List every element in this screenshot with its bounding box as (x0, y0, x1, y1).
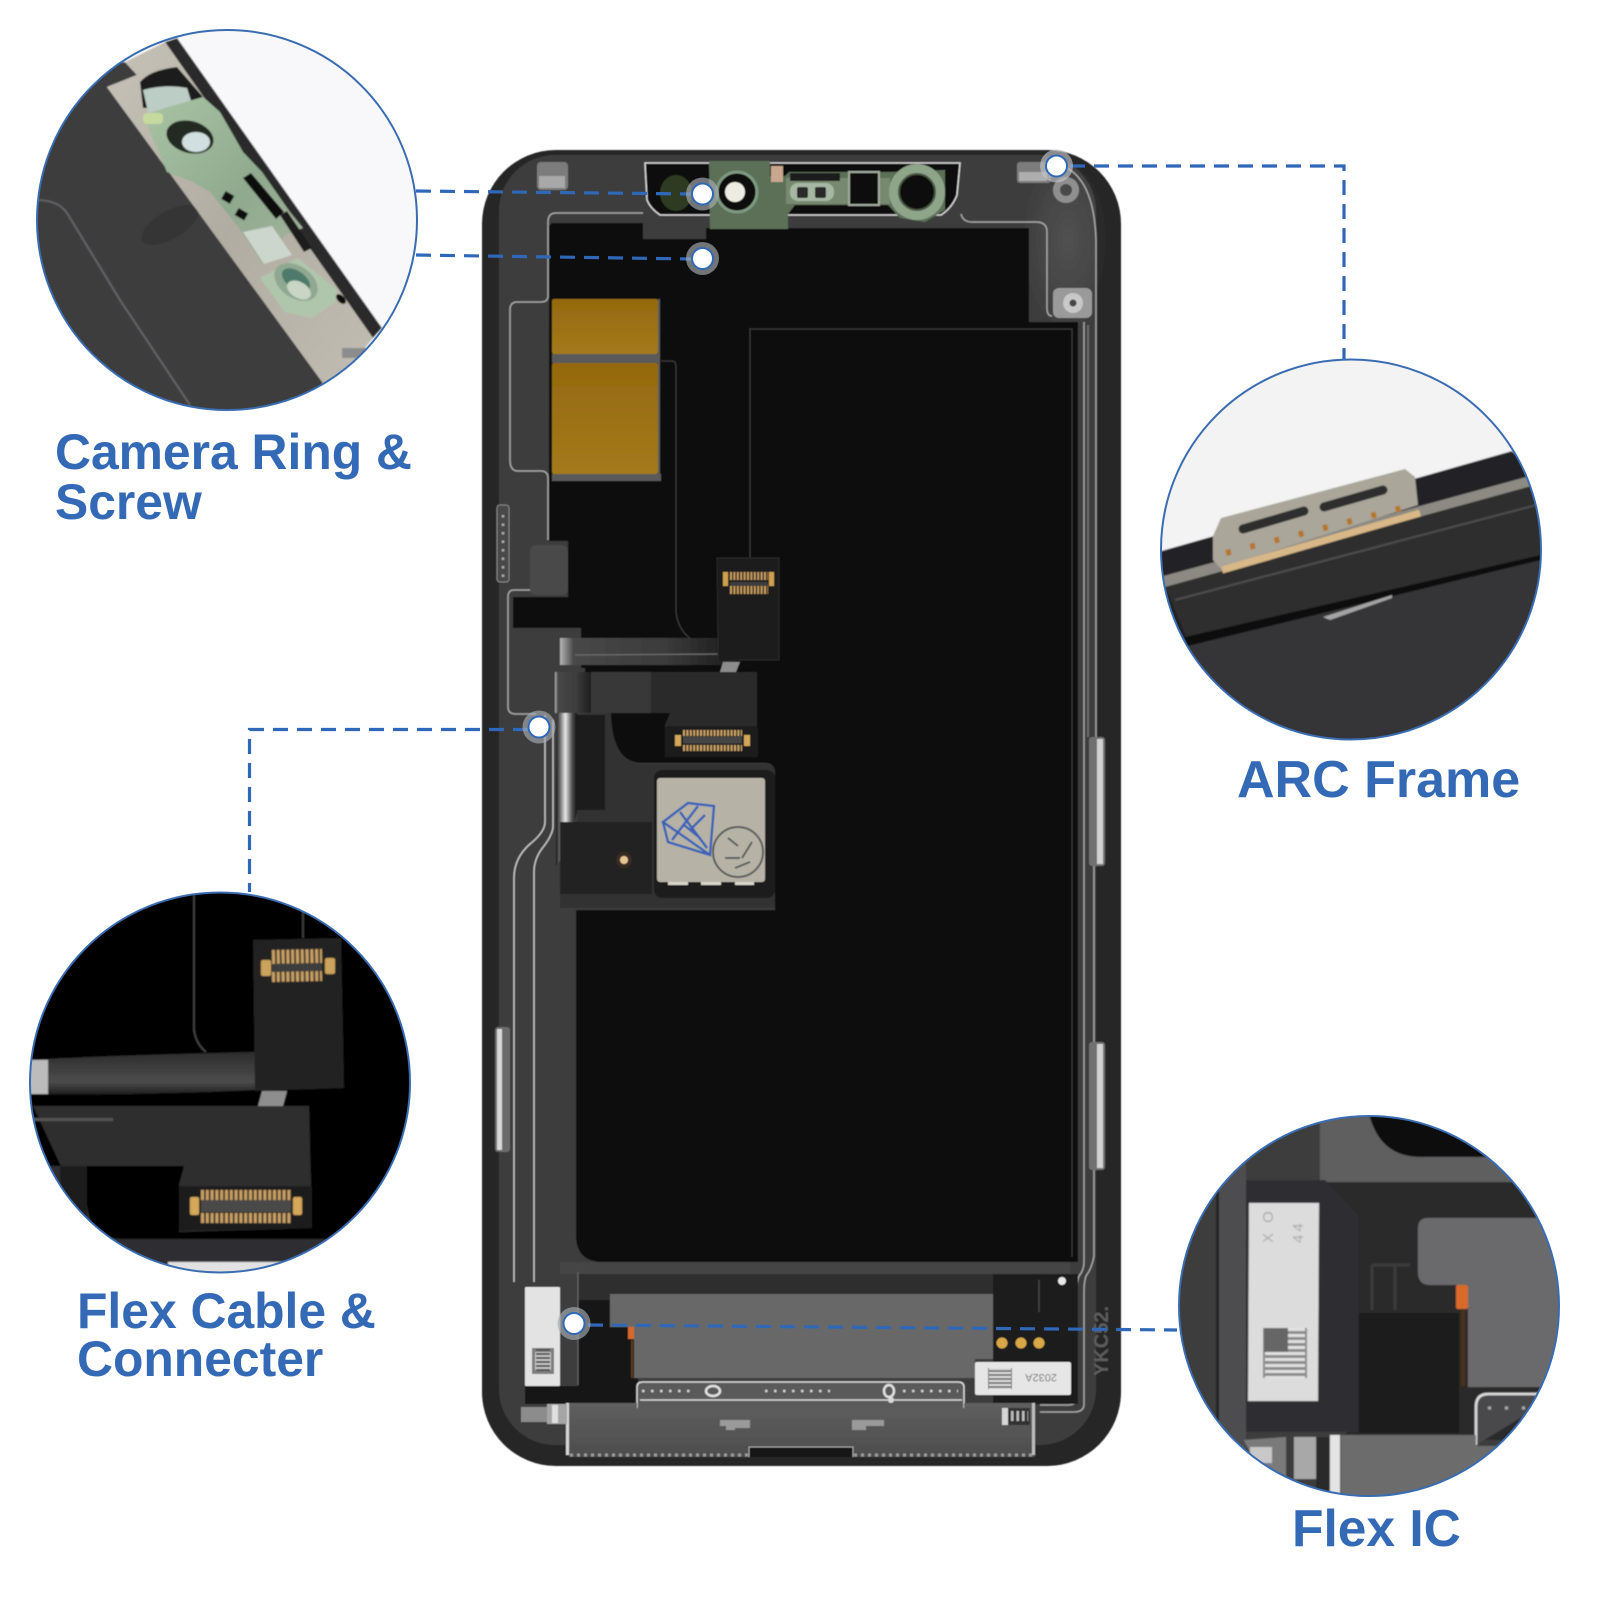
metal tab line (1476, 1394, 1560, 1445)
flex connector pad (665, 726, 758, 757)
light sliver (1323, 595, 1392, 620)
flex connector (723, 572, 774, 590)
plate right edge (1032, 1403, 1035, 1455)
magnified camera ring photo (38, 38, 383, 409)
phone outer body (482, 150, 1121, 1466)
bracket slots (1243, 511, 1304, 529)
chip solder pads (668, 882, 754, 885)
upper flex cable (560, 558, 779, 672)
label: Camera Ring & Screw: Camera Ring & (55, 424, 412, 480)
bracket body (709, 161, 945, 229)
lower dark region right (993, 1274, 1078, 1404)
flex connector (675, 733, 750, 748)
small white dot (1058, 1277, 1066, 1285)
flex highlight (30, 1060, 48, 1094)
thin panel edge lines (661, 329, 1072, 1257)
tag text second row: 44 (1290, 1220, 1307, 1243)
flex ribbon (555, 672, 757, 757)
lower dark region above sheet (578, 1274, 998, 1304)
metal shield chip (657, 778, 765, 885)
bottom left tabs (521, 1404, 567, 1424)
flex ribbon (560, 638, 730, 665)
solder dots (1226, 508, 1402, 553)
glare ribbon (556, 713, 577, 866)
marker: ARC frame (1040, 150, 1073, 182)
label: Flex IC: Flex IC (1292, 1499, 1461, 1557)
engraved code: YKC52. (1091, 1306, 1113, 1376)
side button tab left upper (497, 505, 509, 582)
magnified flex cable photo (28, 890, 414, 1280)
bracket sensor slots (790, 183, 834, 201)
metal strip bright (1294, 1437, 1316, 1479)
lens glass lower (243, 226, 292, 264)
marker: flex IC (558, 1307, 590, 1340)
qr code (532, 1348, 554, 1374)
black block (1359, 1313, 1459, 1433)
side button tab right upper (1089, 737, 1105, 866)
label: Flex Cable & Connecter: Flex Cable & (77, 1283, 376, 1339)
gold patch lower (552, 363, 658, 474)
qr code (1263, 1328, 1307, 1378)
flex shine (33, 1118, 113, 1121)
black seam (1185, 554, 1545, 648)
silver clip (258, 1091, 287, 1106)
panel lines (194, 892, 303, 1052)
slit dark (280, 211, 312, 252)
scratch line (36, 200, 190, 405)
callout: ARC frame (1158, 359, 1545, 745)
dark screen surface (20, 60, 323, 420)
screw plate right (1053, 288, 1092, 318)
lower flex ribbon (33, 1106, 312, 1232)
small tab (342, 348, 366, 358)
tag dark surround (1246, 1180, 1358, 1432)
lower flex cable (555, 672, 758, 757)
white tag left (525, 1287, 560, 1386)
silver bracket (1213, 469, 1418, 568)
bracket nub (143, 113, 163, 124)
small clip (771, 166, 783, 182)
center notch edges (749, 1447, 853, 1457)
leader: flex cable (250, 730, 528, 892)
front camera glint (660, 175, 692, 211)
side button tab left lower (495, 1027, 510, 1152)
top left clear tab (537, 162, 568, 190)
label: Camera Ring & Screw: Screw (55, 474, 202, 530)
upper speaker slot (790, 173, 840, 181)
frame outlines (508, 165, 1096, 1412)
top notch cutout (645, 163, 960, 215)
black frame top surface (1162, 450, 1529, 646)
screw top right (1053, 177, 1079, 203)
lower module pad (560, 822, 652, 894)
under tag dark (525, 1386, 580, 1404)
white sliver (168, 1262, 286, 1274)
black frame edge (165, 38, 382, 338)
thin vertical line (577, 1272, 579, 1385)
lower connector (190, 1195, 302, 1218)
callout: camera ring and screw (36, 29, 418, 411)
gray tab on left (530, 545, 568, 595)
tag text: X O (1260, 1208, 1277, 1243)
orange trace (1461, 1310, 1465, 1386)
black inner panel (513, 223, 1078, 1262)
module carrier (560, 713, 775, 908)
vertical dark seam (1216, 1150, 1219, 1450)
circle outline (1161, 360, 1541, 740)
leader: camera ring (416, 191, 692, 194)
lower connector pad (179, 1186, 312, 1231)
label: Flex Cable & Connecter: Connecter (77, 1331, 323, 1387)
orange strip (628, 1327, 634, 1339)
left light strip (1218, 1150, 1246, 1450)
label: Camera Ring & Screw (55, 424, 412, 530)
smudge (192, 206, 198, 213)
bottom right tab (1002, 1408, 1030, 1425)
top right clear tab (1017, 162, 1051, 183)
qr code (988, 1368, 1012, 1389)
dark central area (1310, 1182, 1560, 1440)
bracket ring bottom (260, 255, 337, 318)
circle outline (30, 892, 410, 1272)
plate marking right (852, 1420, 884, 1430)
gold test dot (616, 852, 632, 868)
bracket slots (221, 173, 284, 220)
gray adhesive sheet (610, 1294, 993, 1378)
dark aperture (849, 172, 879, 205)
bottom gray frame (50, 1164, 327, 1264)
marker dots (522, 150, 1073, 1340)
label: Flex Cable & Connecter (77, 1283, 376, 1387)
marker: flex cable (522, 710, 556, 744)
orange edge (631, 1340, 633, 1378)
dark gap (60, 1166, 88, 1216)
upper connector pad (253, 938, 344, 1091)
tab highlight (1250, 1447, 1272, 1463)
faint traces (1372, 1265, 1410, 1310)
gray round stamp (713, 827, 763, 877)
gray adhesive pad (1418, 1218, 1560, 1387)
metal cutout hole (140, 67, 203, 108)
metal strip edge (1330, 1435, 1340, 1495)
dark layered band (1165, 485, 1545, 640)
marker: camera ring (686, 178, 719, 210)
upper flex ribbon (30, 1052, 255, 1094)
lower black block left (578, 1300, 638, 1405)
callout: flex IC (1176, 1114, 1562, 1500)
gold patch upper (552, 299, 658, 354)
upper connector (261, 956, 335, 977)
orange contact (1456, 1285, 1468, 1309)
leader: ARC frame (1070, 166, 1344, 359)
dark flex section (577, 715, 605, 810)
silver clip (720, 662, 740, 672)
phone screen assembly (482, 150, 1121, 1466)
marker: screw (686, 242, 719, 275)
lower gray ledge (560, 1262, 1070, 1274)
camera bracket (709, 161, 945, 229)
dark shelf (643, 222, 943, 228)
gold contacts (996, 1338, 1044, 1348)
side button tab right lower (1089, 1042, 1105, 1170)
green bracket (143, 97, 303, 265)
label: ARC Frame: ARC Frame (1237, 751, 1520, 809)
inner frame band (499, 155, 1096, 1445)
white tag right (975, 1362, 1071, 1395)
silver stripe (1160, 476, 1535, 587)
magnified ARC frame photo (1158, 359, 1545, 745)
ribbon shine (575, 654, 720, 655)
top gray band (1320, 1114, 1560, 1182)
tag text: 2032A (1025, 1371, 1057, 1383)
thin slit (1038, 1280, 1040, 1312)
dark gap (1316, 1437, 1330, 1497)
bottom left tab (1244, 1437, 1286, 1478)
plate left edge (566, 1403, 569, 1455)
dark slot (335, 293, 347, 305)
serrated edge (570, 1454, 748, 1456)
metal plate (107, 42, 373, 392)
leader: flex IC (588, 1325, 1177, 1330)
plate marking left (720, 1420, 750, 1430)
dashed leader lines (250, 166, 1344, 1330)
white tag (1248, 1203, 1319, 1401)
layer highlight (1175, 504, 1540, 600)
metal connector strip (637, 1382, 964, 1408)
corner sheen (1023, 150, 1113, 330)
blue ink stamp (663, 803, 714, 855)
bracket ring right (889, 164, 945, 220)
circle outline (37, 30, 417, 410)
bracket lens left (717, 172, 757, 212)
magnified flex IC photo (1176, 1114, 1562, 1500)
module pad (654, 770, 775, 898)
callout: flex cable and connector (28, 890, 414, 1280)
lower dark panel (1180, 559, 1545, 745)
lens glass (143, 86, 193, 113)
patch backing (552, 299, 661, 481)
bracket bar light (786, 178, 890, 204)
bottom metal plate (1341, 1435, 1560, 1500)
flex connector pad (717, 558, 779, 662)
contact dots (1488, 1406, 1540, 1410)
circle outline (1179, 1116, 1559, 1496)
leader: screw (416, 255, 692, 259)
gold glow line (1222, 513, 1420, 570)
bottom metal plate (566, 1403, 1035, 1457)
black corner blob (1369, 1114, 1490, 1157)
bracket lens hole (166, 120, 214, 154)
